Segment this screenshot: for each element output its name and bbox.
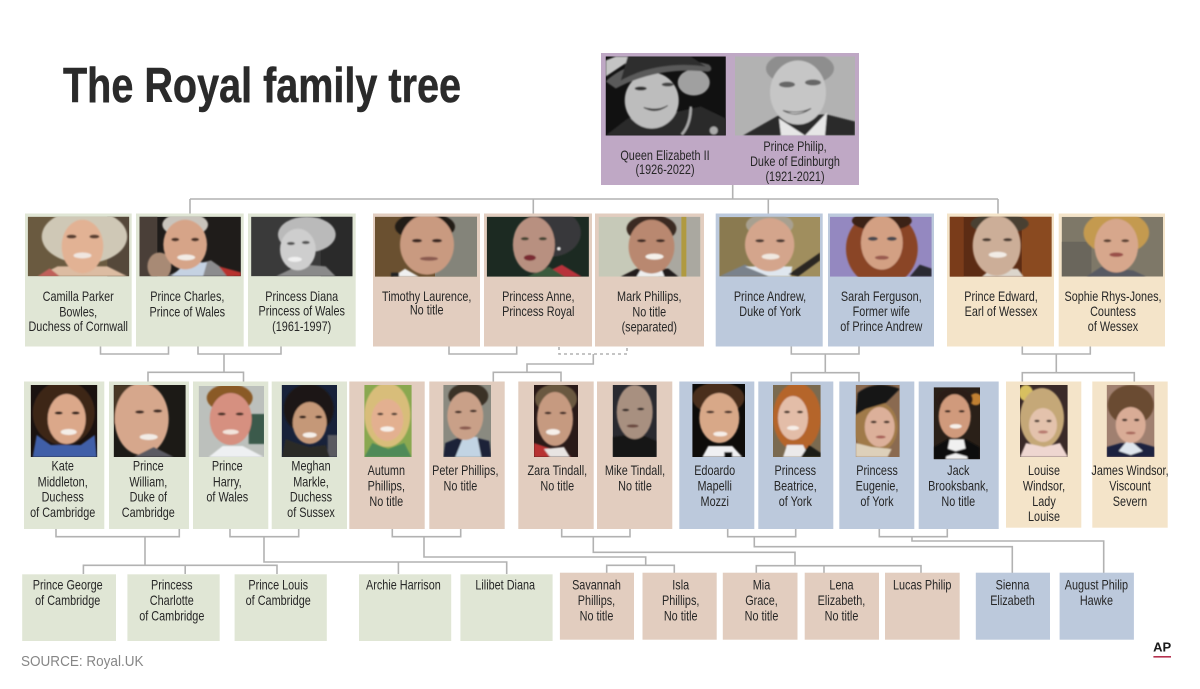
panel: Mia Grace bbox=[723, 573, 798, 640]
photo: Sophie bbox=[1062, 216, 1163, 277]
name: Harry: Prince bbox=[212, 458, 243, 474]
panel: Prince William bbox=[109, 382, 189, 529]
name: Mike: Mike Tindall, bbox=[605, 463, 665, 478]
name: James: Severn bbox=[1113, 494, 1147, 509]
name: James: Viscount bbox=[1109, 478, 1151, 494]
name: Charlotte: Princess bbox=[151, 577, 193, 593]
name: Queen Elizabeth II: Queen Elizabeth II bbox=[620, 148, 710, 163]
name: Peter: Peter Phillips, bbox=[432, 463, 498, 478]
panel: Meghan Markle bbox=[272, 382, 347, 529]
name: Eugenie: of York bbox=[860, 494, 894, 509]
name: Anne: Princess Anne, bbox=[502, 289, 574, 304]
name: Louise: Louise bbox=[1028, 509, 1060, 524]
name: Timothy: Timothy Laurence, bbox=[382, 289, 471, 304]
panel: Princess Beatrice bbox=[758, 382, 833, 529]
name: Meghan: Meghan bbox=[291, 458, 331, 474]
name: Sarah: Sarah Ferguson, bbox=[841, 289, 922, 304]
name: Savannah: Savannah bbox=[572, 577, 621, 593]
photo: William bbox=[114, 385, 186, 457]
name: Edward: Prince Edward, bbox=[964, 289, 1038, 304]
name: Charlotte: Charlotte bbox=[150, 593, 194, 608]
photo: Zara bbox=[534, 385, 578, 457]
panel: Prince Edward bbox=[947, 214, 1054, 346]
name: Camilla: Bowles, bbox=[59, 304, 97, 320]
photo: Kate bbox=[30, 385, 98, 457]
photo: Edward bbox=[950, 216, 1052, 277]
panel: Princess Diana bbox=[248, 214, 356, 346]
panel: Edoardo Mapelli Mozzi bbox=[679, 382, 754, 529]
name: William: Duke of bbox=[130, 489, 168, 505]
photo: Peter bbox=[443, 385, 491, 457]
panel: Peter Phillips bbox=[429, 382, 505, 529]
photo: Diana bbox=[251, 216, 352, 276]
name: Louis: of Cambridge bbox=[246, 593, 311, 608]
name: Autumn: Autumn bbox=[368, 463, 405, 478]
panel: Prince Andrew bbox=[716, 213, 823, 346]
name: William: Prince bbox=[133, 458, 164, 474]
name: Savannah: No title bbox=[580, 608, 614, 624]
name: Meghan: Markle, bbox=[293, 474, 329, 490]
photo: Sarah bbox=[830, 216, 932, 277]
source note: SOURCE: Royal.UK bbox=[21, 653, 144, 670]
name: Edoardo: Mozzi bbox=[701, 494, 729, 509]
name: Zara: Zara Tindall, bbox=[527, 463, 587, 478]
name: August: Hawke bbox=[1080, 593, 1113, 608]
name: Kate: of Cambridge bbox=[30, 505, 95, 520]
name: Mark: No title bbox=[632, 304, 666, 320]
name: Eugenie: Eugenie, bbox=[856, 478, 898, 494]
photo: James bbox=[1106, 385, 1154, 457]
name: Mark: Mark Phillips, bbox=[617, 289, 682, 304]
photo: Louise bbox=[1020, 385, 1068, 457]
name: Lena: Lena bbox=[829, 577, 854, 593]
panel: Princess Anne bbox=[484, 209, 592, 346]
name: Diana: (1961-1997) bbox=[272, 319, 331, 334]
photo: Meghan bbox=[282, 385, 337, 457]
name: Sienna: Elizabeth bbox=[990, 593, 1035, 608]
name: Harry: of Wales bbox=[206, 489, 248, 505]
name: Sarah: Former wife bbox=[853, 304, 910, 319]
name: Lucas: Lucas Philip bbox=[893, 577, 952, 593]
panel: Zara Tindall bbox=[518, 382, 594, 529]
name: Beatrice: Beatrice, bbox=[774, 478, 817, 494]
name: William: William, bbox=[129, 474, 167, 490]
name: Mia: No title bbox=[745, 608, 779, 624]
AP logo: AP bbox=[1153, 640, 1172, 654]
panel: Sarah Ferguson bbox=[828, 211, 934, 346]
panel: Timothy Laurence bbox=[373, 213, 480, 346]
name: Peter: No title bbox=[444, 478, 478, 494]
name: Isla: Isla bbox=[672, 577, 689, 593]
panel: Isla Phillips bbox=[642, 573, 717, 640]
name: Jack: No title bbox=[941, 494, 975, 509]
name: George: of Cambridge bbox=[35, 593, 100, 608]
name: Louis: Prince Louis bbox=[248, 577, 308, 593]
panel: Mike Tindall bbox=[597, 382, 672, 529]
name: Lena: No title bbox=[825, 608, 859, 624]
panel: Prince Louis bbox=[235, 574, 327, 641]
name: Savannah: Phillips, bbox=[578, 593, 615, 608]
panel: Princess Eugenie bbox=[839, 382, 914, 529]
name: William: Cambridge bbox=[122, 505, 175, 520]
name: Edoardo: Edoardo bbox=[694, 463, 735, 478]
name: Charlotte: of Cambridge bbox=[139, 608, 205, 624]
panel: Princess Charlotte bbox=[127, 574, 220, 641]
name: Mia: Grace, bbox=[745, 593, 778, 608]
name: Mia: Mia bbox=[753, 577, 770, 593]
name: Beatrice: Princess bbox=[774, 463, 816, 478]
name: Autumn: No title bbox=[369, 494, 403, 509]
panel: Louise Windsor bbox=[1006, 382, 1081, 528]
name: Edward: Earl of Wessex bbox=[965, 304, 1037, 319]
name: George: Prince George bbox=[33, 577, 103, 593]
name: Isla: No title bbox=[664, 608, 698, 624]
photo: Timothy bbox=[375, 216, 477, 277]
panel: Prince Charles bbox=[136, 213, 244, 346]
name: Diana: Princess Diana bbox=[265, 289, 338, 304]
photo: Beatrice bbox=[773, 385, 821, 457]
name: Edoardo: Mapelli bbox=[698, 478, 732, 494]
photo: Anne bbox=[486, 216, 589, 277]
name: Prince Philip: Prince Philip, bbox=[763, 139, 827, 154]
panel: Sophie Rhys-Jones bbox=[1059, 211, 1165, 346]
name: Sophie: Countess bbox=[1090, 304, 1136, 319]
name: Sarah: of Prince Andrew bbox=[840, 319, 922, 334]
name: Charles: Prince Charles, bbox=[150, 289, 224, 304]
panel: Camilla Parker Bowles bbox=[25, 210, 132, 346]
panel: Jack Brooksbank bbox=[919, 382, 999, 529]
photo: Autumn bbox=[364, 385, 412, 457]
panel: Archie Harrison bbox=[359, 574, 451, 641]
name: Meghan: of Sussex bbox=[287, 505, 335, 520]
title: The Royal family tree bbox=[63, 59, 461, 113]
photo: Eugenie bbox=[856, 385, 900, 457]
name: Eugenie: Princess bbox=[856, 463, 898, 478]
panel: August Philip Hawke bbox=[1060, 573, 1134, 640]
panel: Sienna Elizabeth bbox=[976, 573, 1050, 640]
photo: Camilla bbox=[28, 216, 130, 276]
name: August: August Philip bbox=[1065, 577, 1128, 593]
name: Kate: Kate bbox=[52, 458, 74, 474]
name: Andrew: Prince Andrew, bbox=[734, 289, 806, 304]
name: Andrew: Duke of York bbox=[739, 304, 802, 319]
panel: James Windsor bbox=[1091, 382, 1169, 528]
photo: Andrew bbox=[719, 216, 820, 277]
name: James: James Windsor, bbox=[1091, 463, 1169, 478]
panel: Lucas Philip bbox=[885, 573, 960, 640]
name: Jack: Brooksbank, bbox=[928, 478, 988, 494]
name: Beatrice: of York bbox=[779, 494, 813, 509]
photo: Queen Elizabeth II bbox=[606, 56, 726, 136]
name: Sophie: of Wessex bbox=[1088, 319, 1138, 334]
name: Sienna: Sienna bbox=[996, 577, 1030, 593]
panel: Prince George bbox=[22, 574, 116, 641]
name: Isla: Phillips, bbox=[662, 593, 699, 608]
photo: Edoardo bbox=[692, 384, 745, 457]
name: Louise: Louise bbox=[1028, 463, 1060, 478]
photo: Mike bbox=[612, 385, 657, 457]
panel: Lilibet Diana bbox=[460, 574, 553, 641]
photo: Charles bbox=[140, 216, 241, 276]
name: Harry: Harry, bbox=[213, 474, 242, 490]
connector lines bbox=[56, 185, 1134, 574]
name: Diana: Princess of Wales bbox=[258, 303, 345, 319]
name: Archie: Archie Harrison bbox=[366, 577, 441, 593]
panel: Autumn Phillips bbox=[349, 382, 425, 529]
name: Camilla: Camilla Parker bbox=[43, 289, 114, 304]
panel: Lena Elizabeth bbox=[805, 573, 879, 640]
name: Kate: Middleton, bbox=[38, 474, 88, 490]
name: Zara: No title bbox=[540, 478, 574, 494]
panel: Kate Middleton bbox=[24, 381, 104, 529]
name: Timothy: No title bbox=[410, 302, 444, 318]
photo: Mark bbox=[598, 216, 700, 277]
photo: Prince Philip bbox=[735, 56, 855, 136]
name: Jack: Jack bbox=[947, 463, 970, 478]
panel: Prince Harry bbox=[193, 382, 268, 529]
name: Lilibet: Lilibet Diana bbox=[475, 577, 535, 593]
name: Anne: Princess Royal bbox=[502, 304, 574, 319]
panel: Queen Elizabeth II and Prince Philip bbox=[601, 52, 859, 185]
name: Autumn: Phillips, bbox=[368, 478, 405, 494]
name: Charles: Prince of Wales bbox=[150, 304, 225, 320]
name: Prince Philip: Duke of Edinburgh bbox=[750, 154, 840, 169]
name: Kate: Duchess bbox=[42, 489, 84, 505]
name: Sophie: Sophie Rhys-Jones, bbox=[1064, 289, 1162, 304]
name: Prince Philip: (1921-2021) bbox=[765, 169, 825, 184]
name: Lena: Elizabeth, bbox=[818, 593, 865, 608]
name: Louise: Windsor, bbox=[1023, 478, 1065, 494]
name: Louise: Lady bbox=[1032, 494, 1057, 509]
name: Mike: No title bbox=[618, 478, 652, 494]
photo: Harry bbox=[198, 386, 264, 457]
panel: Mark Phillips bbox=[595, 214, 704, 346]
panel: Savannah Phillips bbox=[560, 573, 634, 640]
name: Queen Elizabeth II: (1926-2022) bbox=[635, 162, 695, 177]
name: Mark: (separated) bbox=[622, 319, 677, 335]
name: Camilla: Duchess of Cornwall bbox=[28, 319, 128, 334]
photo: Jack bbox=[934, 387, 980, 460]
name: Meghan: Duchess bbox=[290, 489, 332, 505]
